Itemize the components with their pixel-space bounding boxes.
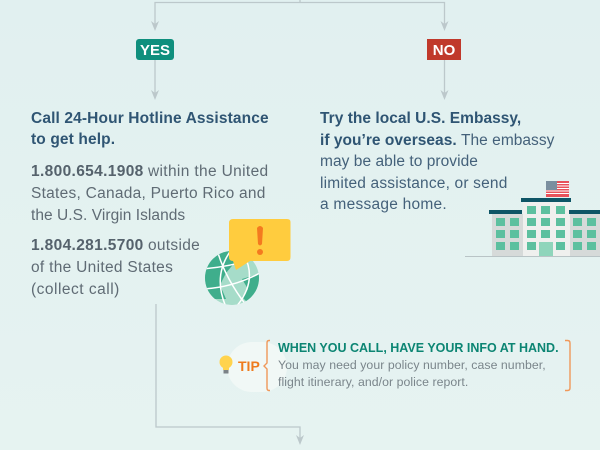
heading: local embassy: Try the local U.S. Embassy, xyxy=(320,110,521,127)
building xyxy=(465,198,600,256)
text: US phone number: States, Canada, Puerto Rico and xyxy=(31,185,266,202)
badge: no xyxy=(427,39,461,60)
tip callout xyxy=(220,340,571,392)
badge: yes: YES xyxy=(140,42,170,59)
heading: hotline assistance: Call 24-Hour Hotline Assistance xyxy=(31,110,269,127)
icon: embassy building with flag xyxy=(465,181,600,257)
tip background blob xyxy=(227,342,287,392)
text: US phone number xyxy=(31,163,269,224)
tip label: TIP xyxy=(238,358,260,374)
text: international phone number xyxy=(31,237,200,298)
tip heading: WHEN YOU CALL, HAVE YOUR INFO AT HAND. xyxy=(278,341,559,355)
text: international phone number: 1.804.281.5700 outside xyxy=(31,237,200,254)
icon: globe xyxy=(205,251,259,305)
badge: no: NO xyxy=(433,42,455,59)
heading: local embassy xyxy=(320,110,554,148)
text: US phone number: 1.800.654.1908 within the United xyxy=(31,163,269,180)
text: international phone number: of the United States xyxy=(31,259,173,276)
text: international phone number: (collect call) xyxy=(31,281,120,298)
heading: local embassy: if you’re overseas. The embassy xyxy=(320,132,554,148)
icon: alert speech bubble xyxy=(229,219,290,270)
text: US phone number: the U.S. Virgin Islands xyxy=(31,207,185,224)
text: embassy details: a message home. xyxy=(320,196,447,213)
right bracket xyxy=(565,340,571,392)
left bracket xyxy=(263,340,270,392)
badge: yes xyxy=(136,39,174,60)
tip text: flight itinerary, and/or police report. xyxy=(278,375,468,389)
icon: light bulb xyxy=(220,356,232,374)
text: embassy details: limited assistance, or send xyxy=(320,174,508,192)
text: embassy details: may be able to provide xyxy=(320,153,478,170)
tip text: You may need your policy number, case number, xyxy=(278,358,546,372)
text: embassy details xyxy=(320,153,508,213)
icon: US flag xyxy=(546,181,569,197)
heading: hotline assistance xyxy=(31,110,269,148)
tip text xyxy=(278,358,546,389)
heading: hotline assistance: to get help. xyxy=(31,131,115,148)
icon: globe with alert bubble xyxy=(205,219,290,305)
